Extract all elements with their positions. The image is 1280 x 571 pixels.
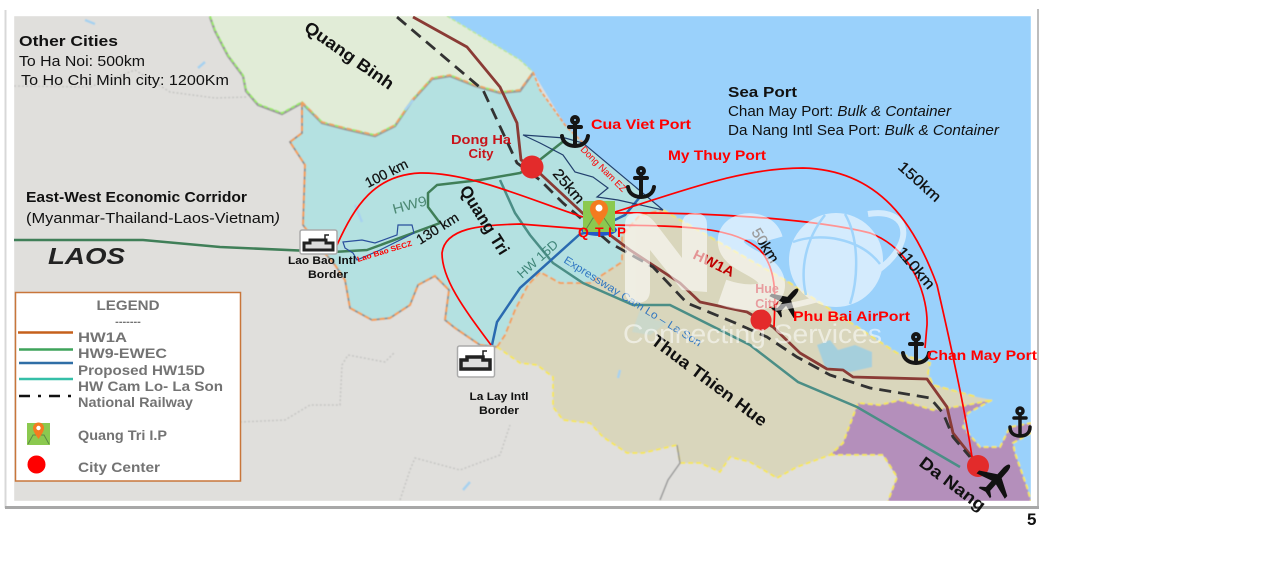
legend: National Railway bbox=[78, 395, 194, 410]
label: Lao Bao Intl Border: Lao Bao Intl bbox=[288, 255, 356, 267]
label: East-West Economic Corridor: (Myanmar-Thailand-Laos-Vietnam ) bbox=[26, 210, 280, 227]
legend icon: city center bbox=[28, 456, 46, 474]
label: La Lay Intl Border: La Lay Intl bbox=[470, 391, 528, 403]
legend: HW Cam Lo- La Son bbox=[78, 379, 223, 394]
icon: anchor My Thuy bbox=[628, 168, 654, 197]
label: La Lay Intl Border bbox=[470, 391, 528, 417]
sea bbox=[447, 16, 1031, 501]
label: Da Nang: Da Nang bbox=[916, 453, 989, 515]
label: 150km: 150km bbox=[894, 158, 944, 206]
label: Other Cities: To Ha Noi: 500km bbox=[19, 53, 145, 70]
road: HW1A bbox=[413, 17, 972, 457]
icon: Lao Bao border gate bbox=[300, 230, 337, 254]
port labels: Phu Bai AirPort bbox=[793, 308, 910, 324]
legend title: LEGEND bbox=[96, 298, 160, 313]
small rivers bbox=[85, 20, 620, 490]
city marker: Da Nang bbox=[967, 455, 989, 477]
label: 100 km: 100 km bbox=[362, 156, 410, 191]
watermark text: Connecting Services bbox=[623, 319, 882, 349]
label: Expressway Cam Lo - La Son: Expressway Cam Lo – La Son bbox=[561, 254, 703, 349]
road: Cam Lo - La Son expressway bbox=[500, 180, 960, 467]
label: East-West Economic Corridor: East-West Economic Corridor bbox=[26, 189, 247, 206]
label: 130 km: 130 km bbox=[413, 209, 461, 248]
icon: plane Da Nang bbox=[970, 452, 1024, 506]
label: Dong Ha City bbox=[451, 133, 512, 161]
legend line: railway bbox=[19, 395, 73, 397]
outline: Dong Nam economic zone bbox=[523, 135, 663, 210]
label: East-West Economic Corridor bbox=[26, 189, 280, 227]
legend: Quang Tri I.P bbox=[78, 428, 167, 443]
legend line: HW9-EWEC bbox=[19, 348, 73, 351]
icon: La Lay border gate bbox=[458, 346, 494, 377]
legend line: HW15D bbox=[19, 362, 73, 364]
legend: Proposed HW15D bbox=[78, 363, 205, 378]
port labels: My Thuy Port bbox=[668, 147, 766, 163]
outline: Lao Bao SECZ bbox=[343, 225, 414, 260]
label: Quang Binh: Quang Binh bbox=[301, 18, 398, 94]
icon: plane Phu Bai bbox=[764, 278, 810, 324]
label: Lao Bao Intl Border: Border bbox=[308, 269, 349, 281]
map frame bbox=[5, 9, 1039, 508]
label: QTIP: QTIP bbox=[578, 224, 626, 240]
label: HW1A: HW1A bbox=[691, 246, 737, 280]
label: Dong Ha City: Dong Ha bbox=[451, 133, 512, 147]
label: Sea Port: Chan May Port: Bulk & Container bbox=[728, 103, 952, 120]
icon: anchor Chan May bbox=[903, 334, 929, 363]
NSC watermark logo bbox=[625, 213, 903, 308]
page number: 5 bbox=[1027, 510, 1036, 529]
label: Hue City: Hue bbox=[755, 282, 779, 296]
label: Sea Port bbox=[728, 84, 1000, 139]
globe meridians bbox=[793, 214, 880, 304]
label: Quang Tri: Quang Tri bbox=[456, 182, 513, 258]
port labels: Cua Viet Port bbox=[591, 116, 691, 132]
label: Sea Port: Sea Port bbox=[728, 84, 797, 101]
label: Thua Thien Hue: Thua Thien Hue bbox=[648, 331, 771, 430]
label: Other Cities: Other Cities bbox=[19, 33, 118, 50]
city marker: Dong Ha bbox=[520, 156, 544, 178]
icon: Quang Tri I.P marker bbox=[581, 200, 617, 236]
legend bbox=[16, 292, 240, 481]
legend icon: Quang Tri I.P bbox=[27, 422, 50, 445]
region: Da Nang bbox=[830, 400, 1031, 501]
national railway bbox=[397, 17, 970, 457]
icon: anchor Cua Viet bbox=[562, 117, 588, 146]
region: Thua Thien Hue bbox=[497, 210, 992, 478]
map labels bbox=[19, 18, 1030, 515]
legend line: HW1A bbox=[18, 331, 73, 334]
provincial borders bbox=[210, 17, 533, 136]
label: 50km: 50km bbox=[748, 225, 782, 266]
label: Other Cities: To Ho Chi Minh city: 1200Km bbox=[21, 72, 229, 89]
label: Lao Bao SECZ: Lao Bao SECZ bbox=[356, 239, 414, 264]
legend: ------- bbox=[115, 316, 141, 328]
port labels bbox=[591, 116, 1037, 363]
legend: City Center bbox=[78, 460, 161, 475]
label: LAOS: LAOS bbox=[48, 243, 126, 269]
label: Dong Ha City: City bbox=[468, 147, 494, 161]
label: Other Cities bbox=[19, 33, 229, 89]
label: HW 15D: HW 15D bbox=[514, 237, 561, 281]
label: 25km: 25km bbox=[549, 166, 588, 207]
label: Dong Nam EZ: Dong Nam EZ bbox=[578, 144, 628, 195]
region: Quang Tri bbox=[290, 72, 663, 347]
base map bbox=[14, 16, 1031, 501]
legend: HW9-EWEC bbox=[78, 346, 167, 361]
road: HW9 east-west corridor bbox=[10, 140, 565, 252]
label: Hue City: City bbox=[755, 297, 779, 311]
label: HW9: HW9 bbox=[391, 192, 429, 217]
lagoon bbox=[817, 340, 872, 372]
legend line: Cam Lo - La Son bbox=[19, 378, 73, 380]
road: HW15D bbox=[492, 197, 640, 345]
icon: anchor Da Nang bbox=[1010, 408, 1030, 436]
legend: HW1A bbox=[78, 330, 127, 345]
label: La Lay Intl Border: Border bbox=[479, 405, 520, 417]
label: Hue City bbox=[755, 282, 779, 311]
Laos dotted boundaries bbox=[14, 70, 510, 500]
distance arcs bbox=[337, 168, 972, 457]
port labels: Chan May Port bbox=[927, 347, 1037, 363]
city marker: Hue bbox=[750, 310, 772, 330]
label: 110km: 110km bbox=[893, 244, 938, 293]
label: Sea Port: Da Nang Intl Sea Port: Bulk & Container bbox=[728, 122, 1000, 139]
label: Lao Bao Intl Border bbox=[288, 255, 356, 281]
region: Quang Binh bbox=[210, 16, 533, 135]
